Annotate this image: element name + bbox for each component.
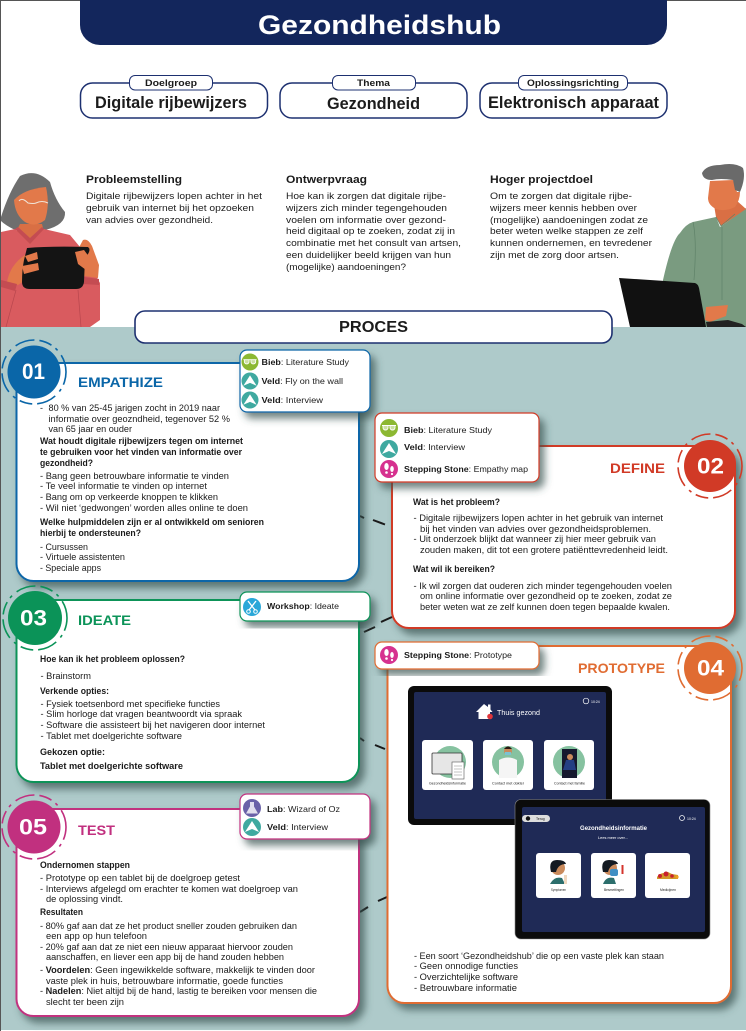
text block: empathize findings	[40, 403, 264, 573]
text block: prototype features: - Geen onnodige functies	[414, 961, 519, 971]
label box: Thema: Thema	[357, 78, 391, 89]
label box: Oplossingsrichting: Oplossingsrichting	[527, 78, 619, 89]
tablet screen: Gezondheidsinformatie: Terug	[536, 817, 545, 821]
screen card: besmettingen: Besmettingen	[604, 888, 624, 892]
screen card: contact met familie: Contact met familie	[554, 782, 585, 786]
text block: Ontwerpvraag: Ontwerpvraag	[286, 174, 367, 186]
text block: Ontwerpvraag: combinatie met het consult van artsen,	[286, 238, 461, 249]
text block: test	[40, 860, 317, 1007]
text block: define: - Ik wil zorgen dat ouderen zich minder tegengehouden voelen	[414, 581, 672, 591]
methods box: prototype	[375, 642, 539, 669]
step number 05: 05	[19, 814, 47, 840]
screen card: gezondheidsinformatie	[422, 740, 473, 790]
text block: test: slecht ter been zijn	[46, 997, 124, 1007]
text block: define	[413, 497, 672, 612]
text block: empathize findings: - Bang geen betrouwbare informatie te vinden	[40, 471, 229, 481]
screen card: contact met familie	[544, 740, 594, 790]
text block: test: de oplossing vindt.	[46, 894, 123, 904]
text block: Ontwerpvraag: heid digitaal op te zoeken, zodat zij in	[286, 226, 455, 237]
step number 04: 04	[697, 656, 725, 680]
text block: Ontwerpvraag: een duidelijker beeld krijgen van hun	[286, 250, 451, 261]
text block: test: - 80% gaf aan dat ze het product sneller zouden gebruiken dan	[40, 921, 297, 931]
methods box: prototype: Stepping Stone: Prototype	[404, 650, 512, 660]
text block: empathize findings: informatie over geozndheid, tegenover 52 %	[48, 414, 230, 424]
step number 02: 02	[697, 454, 724, 478]
text block: define: Wat is het probleem?	[413, 497, 500, 507]
text block: Probleemstelling: gebruik van internet bij het opzoeken	[86, 203, 254, 214]
panel: 02 Define	[375, 413, 742, 628]
methods box: test	[240, 794, 370, 839]
text block: empathize findings: Welke hulpmiddelen zijn er al ontwikkeld om senioren	[40, 517, 264, 527]
text block: Probleemstelling: van advies over gezondheid.	[86, 215, 213, 226]
methods box: define: Veld: Interview	[404, 442, 466, 452]
panel: 01 Empathize	[2, 340, 370, 581]
methods box: empathize: Veld: Interview	[262, 395, 324, 405]
label box: Doelgroep: Digitale rijbewijzers	[95, 93, 247, 112]
text block: empathize findings: - Cursussen	[40, 542, 88, 552]
text block: Hoger projectdoel: (mogelijke) aandoeningen zodat ze	[490, 215, 648, 226]
text block: define: zouden maken, dit tot een grotere patiënttevredenheid leidt.	[420, 545, 668, 555]
text block: test: - Voordelen: Geen ingewikkelde software, makkelijk te vinden door	[40, 965, 315, 975]
text block: test: - 20% gaf aan dat ze niet een nieuw apparaat hiervoor zouden	[40, 942, 293, 952]
text block: empathize findings: - Te veel informatie te vinden op internet	[40, 481, 208, 491]
text block: ideate: Hoe kan ik het probleem oplossen?	[40, 654, 185, 664]
text block: prototype features: - Betrouwbare informatie	[414, 983, 517, 993]
text block: Hoger projectdoel: Om te zorgen dat digitale rijbe-	[490, 191, 632, 202]
panel: 05 Test	[2, 794, 370, 1016]
label box: Thema: Gezondheid	[327, 94, 420, 113]
screen card: medicijnen: Medicijnen	[660, 888, 676, 892]
heading: Prototype: PROTOTYPE	[578, 660, 665, 676]
methods box: define	[375, 413, 539, 482]
methods box: ideate	[240, 592, 370, 621]
text block: Ontwerpvraag: voelen om informatie over gezond-	[286, 215, 446, 226]
methods box: ideate: Workshop: Ideate	[267, 601, 339, 611]
text block: Ontwerpvraag	[285, 174, 461, 273]
text block: empathize findings: Wat houdt digitale rijbewijzers tegen om internet	[40, 436, 243, 446]
tablet screen: Thuis gezond	[408, 686, 612, 825]
text block: Ontwerpvraag: (mogelijke) aandoeningen?	[286, 262, 406, 273]
text block: prototype features: - Overzichtelijke software	[414, 972, 518, 982]
text block: Hoger projectdoel: wijzers meer kennis hebben over	[489, 203, 637, 214]
screen card: besmettingen	[591, 853, 636, 898]
text block: empathize findings: -	[40, 403, 43, 413]
text block: Hoger projectdoel: beter weten welke stappen ze zelf	[490, 226, 643, 237]
heading: Test: TEST	[78, 822, 115, 838]
text block: empathize findings: - Speciale apps	[40, 563, 101, 573]
text block: ideate: Gekozen optie:	[40, 747, 105, 757]
text block: Ontwerpvraag: Hoe kan ik zorgen dat digitale rijbe-	[286, 191, 446, 202]
text block: empathize findings: hierbij te ondersteunen?	[40, 528, 141, 538]
text block: Hoger projectdoel	[489, 174, 652, 261]
text block: ideate: - Brainstorm	[40, 671, 91, 681]
label box: Doelgroep	[80, 76, 268, 118]
text block: ideate: - Slim horloge dat vragen beantwoordt via spraak	[40, 709, 243, 719]
heading: Empathize: EMPATHIZE	[78, 374, 163, 390]
panel: 03 Ideate	[3, 586, 370, 782]
text block: define: om online informatie over gezondheid op te zoeken, zodat ze	[420, 591, 672, 601]
text block: empathize findings: van 65 jaar en ouder	[48, 424, 132, 434]
tablet screen: Gezondheidsinformatie	[515, 800, 710, 939]
text block: define: beter weten wat ze zelf kunnen doen tegen bepaalde kwalen.	[420, 602, 670, 612]
text block: define: Wat wil ik bereiken?	[413, 564, 495, 574]
icon: house	[476, 704, 492, 719]
text block: prototype features	[414, 951, 664, 993]
label box: Oplossingsrichting: Elektronisch apparaat	[488, 93, 659, 112]
text block: empathize findings: - Virtuele assistenten	[40, 552, 125, 562]
text block: ideate: - Tablet met doelgerichte software	[40, 731, 182, 741]
text block: define: - Uit onderzoek blijkt dat wanneer zij hier meer gebruik van	[414, 534, 656, 544]
methods box: define: Stepping Stone: Empathy map	[404, 464, 528, 474]
methods box: empathize: Bieb: Literature Study	[262, 357, 350, 367]
text block: test: aanschaffen, en liever een app bij de hand zouden hebben	[46, 952, 284, 962]
text block: ideate: - Fysiek toetsenbord met specifieke functies	[40, 699, 221, 709]
step number 03: 03	[20, 606, 47, 630]
illustration: woman with tablet	[1, 173, 100, 327]
text block: ideate	[40, 654, 266, 771]
label box: Thema	[280, 76, 467, 118]
text block: ideate: Tablet met doelgerichte software	[40, 761, 183, 771]
title: Gezondheidshub	[258, 10, 501, 40]
header banner	[80, 0, 667, 45]
heading: Ideate: IDEATE	[78, 612, 131, 628]
screen card: gezondheidsinformatie: Gezondheidsinformatie	[429, 782, 466, 786]
text block: ideate: - Software die assisteert bij het navigeren door internet	[40, 720, 266, 730]
panel: 04 Prototype	[375, 636, 742, 1003]
text block: test: een app op hun telefoon	[46, 931, 147, 941]
text block: prototype features: - Een soort ‘Gezondheidshub’ die op een vaste plek kan staan	[414, 951, 664, 961]
methods box: empathize	[240, 350, 370, 412]
step number 01: 01	[22, 359, 45, 384]
screen card: contact met dokter: Contact met dokter	[492, 782, 525, 786]
tablet screen: Thuis gezond: 10:24	[591, 700, 600, 704]
text block: test: - Prototype op een tablet bij de doelgroep getest	[40, 873, 241, 883]
text block: test: Resultaten	[40, 907, 83, 917]
methods box: define: Bieb: Literature Study	[404, 425, 493, 435]
text block: Probleemstelling: Digitale rijbewijzers lopen achter in het	[86, 191, 262, 202]
methods box: test: Veld: Interview	[267, 822, 329, 832]
text block: Hoger projectdoel: Hoger projectdoel	[490, 174, 593, 186]
methods box: empathize: Veld: Fly on the wall	[262, 376, 343, 386]
text block: empathize findings: 80 % van 25-45 jarigen zocht in 2019 naar	[48, 403, 220, 413]
heading: PROCES: PROCES	[339, 319, 408, 336]
text block: Hoger projectdoel: kunnen ondernemen, en tevredener	[490, 238, 652, 249]
screen card: symptomen	[536, 853, 581, 898]
tablet screen: Thuis gezond: Thuis gezond	[497, 710, 540, 717]
text block: Probleemstelling	[86, 174, 262, 226]
text block: test: - Interviews afgelegd om erachter te komen wat doelgroep van	[40, 884, 298, 894]
text block: define: bij het vinden van advies over gezondheidsproblemen.	[420, 524, 651, 534]
connector dashes between cards	[360, 516, 392, 912]
screen card: medicijnen	[645, 853, 690, 898]
illustration: man with laptop	[619, 164, 746, 327]
text block: empathize findings: gezondheid?	[40, 458, 93, 468]
text block: test: vaste plek in huis, betrouwbare informatie, goede functies	[46, 976, 284, 986]
teal process background	[1, 327, 746, 1030]
heading: PROCES	[135, 311, 612, 343]
text block: Hoger projectdoel: zijn met de zorg door artsen.	[490, 250, 619, 261]
tablet screen: Gezondheidsinformatie: 10:24	[687, 817, 696, 821]
text block: test: Ondernomen stappen	[40, 860, 130, 870]
text block: ideate: Verkende opties:	[40, 686, 109, 696]
tablet screen: Gezondheidsinformatie: Gezondheidsinformatie	[580, 826, 648, 832]
text block: empathize findings: - Wil niet ‘gedwongen’ worden alles online te doen	[40, 503, 248, 513]
label box: Oplossingsrichting	[480, 76, 667, 118]
methods box: test: Lab: Wizard of Oz	[267, 804, 340, 814]
text block: Probleemstelling: Probleemstelling	[86, 174, 182, 186]
heading: Define: DEFINE	[610, 460, 665, 476]
text block: test: - Nadelen: Niet altijd bij de hand, lastig te bereiken voor mensen die	[40, 986, 317, 996]
text block: define: - Digitale rijbewijzers lopen achter in het gebruik van internet	[414, 513, 664, 523]
tablet screen: Gezondheidsinformatie: Lees meer over...	[598, 836, 628, 840]
screen card: symptomen: Symptomen	[551, 888, 566, 892]
text block: Ontwerpvraag: wijzers zich minder tegengehouden	[285, 203, 447, 214]
text block: empathize findings: te gebruiken voor het vinden van informatie over	[40, 447, 242, 457]
screen card: contact met dokter	[483, 740, 533, 790]
text block: empathize findings: - Bang om op verkeerde knoppen te klikken	[40, 492, 218, 502]
label box: Doelgroep: Doelgroep	[145, 78, 197, 89]
